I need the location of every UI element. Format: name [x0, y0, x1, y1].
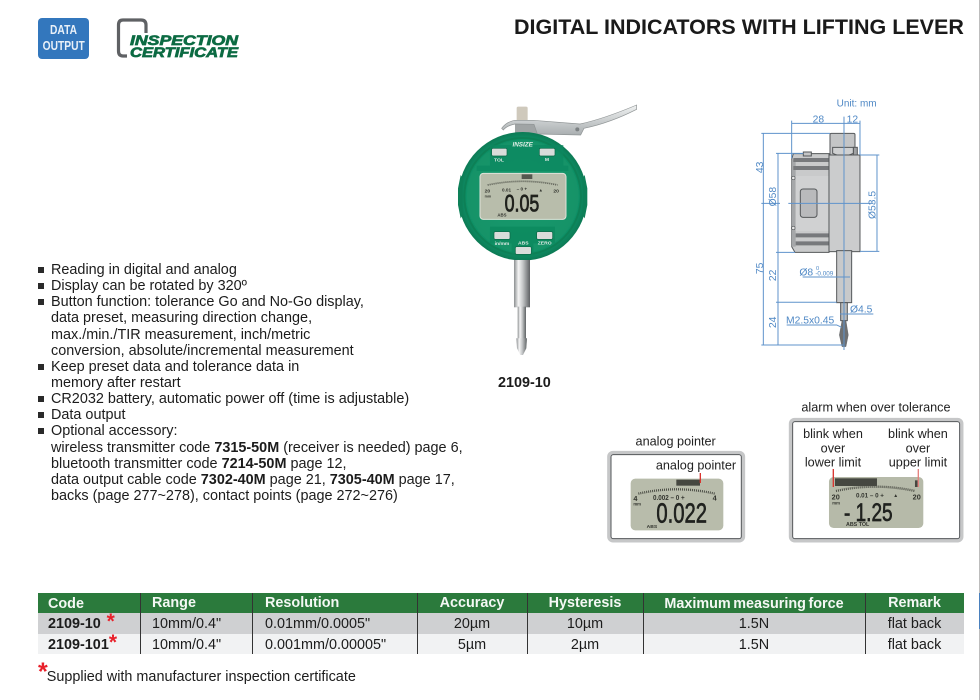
- logo: inspection certificate: CERTIFICATE: [130, 44, 239, 60]
- panel: alarm when over tolerance: 20: [913, 493, 921, 502]
- specification table: flat back: [888, 616, 941, 632]
- title: DIGITAL INDICATORS WITH LIFTING LEVER: [514, 15, 964, 39]
- specification table: 20µm: [454, 616, 490, 632]
- specification table: Range: [152, 595, 196, 611]
- product photo: digital indicator: – 0 +: [517, 186, 527, 191]
- logo: inspection certificate: [118, 20, 239, 60]
- dimension drawing: Ø4.5: [850, 305, 873, 316]
- specification table: flat back: [888, 637, 941, 653]
- panel: analog pointer: analog pointer: [656, 459, 736, 473]
- feature list: Display can be rotated by 320º: [51, 278, 247, 294]
- product photo: digital indicator: ABS: [518, 241, 529, 247]
- product photo: digital indicator: mm: [485, 195, 492, 199]
- specification table: 2µm: [571, 637, 599, 653]
- specification table: Hysteresis: [549, 595, 621, 611]
- lifting lever: [502, 105, 637, 135]
- panel: analog pointer: 4: [713, 493, 718, 502]
- stem and contact: [514, 260, 530, 307]
- panel: alarm when over tolerance: over: [821, 441, 845, 455]
- feature list: data output cable code 7302-40M page 21, 7305-40M page 17,: [51, 472, 455, 488]
- dimension drawing: Ø53.5: [867, 191, 878, 219]
- specification table: 2109-10 *: [48, 610, 115, 633]
- product photo: digital indicator: 20: [485, 188, 490, 194]
- dimension drawing: 28: [813, 115, 824, 126]
- feature list: wireless transmitter code 7315-50M (receiver is needed) page 6,: [51, 440, 463, 456]
- dimension drawing: Ø8: [799, 267, 813, 278]
- specification table: Remark: [888, 595, 941, 611]
- panel: analog pointer: mm: [633, 502, 641, 507]
- feature list: data preset, measuring direction change,: [51, 310, 312, 326]
- specification table: 10mm/0.4": [152, 637, 221, 653]
- page edge rule: [979, 0, 980, 700]
- dimension drawing: [755, 99, 879, 350]
- brand mark: INSIZE: [512, 141, 534, 148]
- dimension drawing: 0: [816, 266, 819, 272]
- panel: analog pointer: analog pointer: [636, 434, 716, 448]
- specification table: 10µm: [567, 616, 603, 632]
- badge: data output: [38, 18, 89, 59]
- panel: alarm when over tolerance: alarm when over tolerance: [801, 401, 951, 415]
- dimension lines: [761, 117, 879, 350]
- LCD: [480, 173, 566, 219]
- footnote: *Supplied with manufacturer inspection certificate: [38, 658, 356, 686]
- specification table: 1.5N: [739, 616, 769, 632]
- unit label: Unit: mm: [837, 99, 877, 110]
- panel: alarm when over tolerance: mm: [832, 501, 840, 506]
- dimension drawing: 12: [847, 115, 858, 126]
- panel: analog pointer: 4: [633, 494, 638, 503]
- LCD screen: [829, 477, 923, 528]
- product photo: digital indicator: M: [545, 157, 549, 163]
- product photo: digital indicator: 0.05: [505, 191, 539, 218]
- logo: inspection certificate: INSPECTION: [130, 32, 239, 48]
- feature list: CR2032 battery, automatic power off (time is adjustable): [51, 391, 409, 407]
- panel: alarm when over tolerance: upper limit: [889, 455, 948, 469]
- panel: alarm when over tolerance: [791, 401, 962, 541]
- product photo: digital indicator: ZERO: [538, 241, 552, 247]
- dial body: [458, 132, 587, 261]
- panel: alarm when over tolerance: blink when: [888, 427, 948, 441]
- LCD screen: [631, 479, 723, 530]
- panel: alarm when over tolerance: ▲: [893, 493, 898, 499]
- product photo: digital indicator: in/mm: [495, 241, 510, 247]
- panel: alarm when over tolerance: - 1.25: [844, 499, 893, 527]
- specification table: 0.001mm/0.00005": [265, 637, 386, 653]
- feature list: Button function: tolerance Go and No-Go display,: [51, 294, 364, 310]
- product photo: digital indicator: [458, 105, 637, 355]
- panel: alarm when over tolerance: lower limit: [805, 455, 862, 469]
- specification table: 0.01mm/0.0005": [265, 616, 370, 632]
- specification table: 10mm/0.4": [152, 616, 221, 632]
- dial buttons: [492, 148, 555, 254]
- dimension drawing: Ø58: [768, 187, 779, 206]
- feature list: [38, 262, 463, 504]
- dimension drawing: M2.5x0.45: [786, 315, 834, 326]
- dimension drawing: 24: [768, 316, 779, 328]
- specification table: 5µm: [458, 637, 486, 653]
- badge: data output: OUTPUT: [43, 38, 85, 52]
- feature list: Keep preset data and tolerance data in: [51, 359, 299, 375]
- product photo: digital indicator: TOL: [494, 158, 504, 164]
- panel: alarm when over tolerance: 20: [832, 493, 840, 502]
- feature list: Optional accessory:: [51, 423, 178, 439]
- panel: analog pointer: 0.022: [656, 497, 707, 528]
- side view body: [792, 133, 860, 347]
- product photo: digital indicator: 20: [553, 188, 559, 194]
- panel: alarm when over tolerance: over: [906, 441, 930, 455]
- badge: data output: DATA: [50, 23, 77, 37]
- dimension drawing: -0.009: [815, 271, 834, 278]
- feature list: bluetooth transmitter code 7214-50M page 12,: [51, 456, 347, 472]
- product photo: digital indicator: ▲: [539, 187, 543, 192]
- feature list: Reading in digital and analog: [51, 262, 237, 278]
- panel: analog pointer: 0.002 – 0 +: [653, 495, 685, 502]
- panel: alarm when over tolerance: 0.01 – 0 +: [856, 492, 884, 499]
- panel: analog pointer: ABS: [647, 524, 658, 530]
- dimension drawing: 43: [755, 161, 766, 173]
- specification table: [38, 593, 964, 654]
- feature list: Data output: [51, 407, 126, 423]
- product photo: digital indicator: ABS: [497, 213, 507, 218]
- panel: analog pointer: [609, 434, 743, 541]
- feature list: backs (page 277~278), contact points (page 272~276): [51, 488, 398, 504]
- specification table: 1.5N: [739, 637, 769, 653]
- model label: 2109-10: [498, 375, 551, 391]
- specification table: Resolution: [265, 595, 339, 611]
- specification table: Maximum measuring force: [664, 596, 844, 612]
- feature list: max./min./TIR measurement, inch/metric: [51, 327, 310, 343]
- panel: alarm when over tolerance: ABS TOL: [846, 522, 870, 528]
- feature list: memory after restart: [51, 375, 181, 391]
- feature list: conversion, absolute/incremental measurement: [51, 343, 354, 359]
- specification table: Accuracy: [440, 595, 504, 611]
- product photo: digital indicator: 0.01: [502, 188, 511, 193]
- panel: alarm when over tolerance: blink when: [803, 427, 863, 441]
- dimension drawing: 75: [755, 262, 766, 274]
- specification table: Code: [48, 596, 84, 612]
- specification table: 2109-101*: [48, 631, 117, 654]
- dimension drawing: 22: [768, 269, 779, 281]
